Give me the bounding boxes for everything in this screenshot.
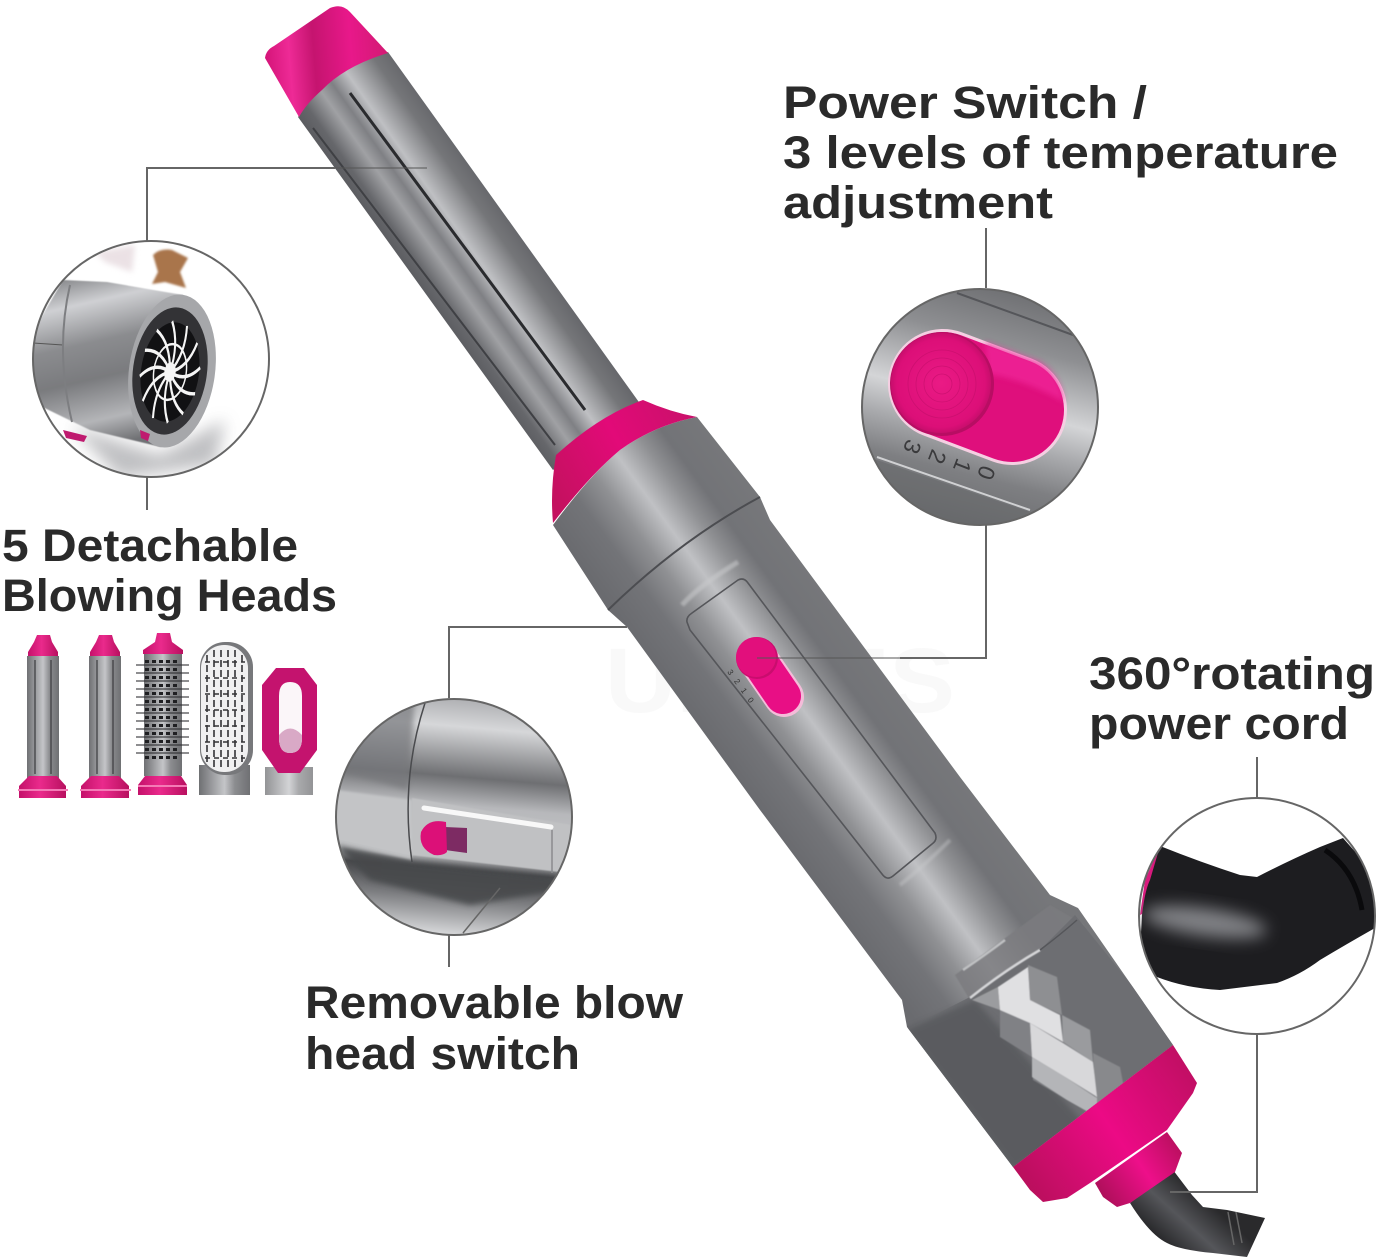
heading: rotating cord (1089, 648, 1375, 749)
heading: power switch: Power Switch / (783, 77, 1148, 128)
heading: removable head switch: head switch (305, 1028, 580, 1079)
callout circle: air outlet detail (28, 241, 269, 478)
neck collar (552, 400, 697, 523)
fan spokes (139, 320, 201, 424)
main product: hair styler (265, 6, 1265, 1257)
lower seams (963, 940, 1005, 970)
slot (424, 808, 551, 827)
attachment: curling barrel 1 (18, 635, 68, 798)
temperature numbers: 3 (898, 436, 927, 457)
heading: power switch (783, 77, 1338, 228)
temperature numbers (904, 440, 994, 479)
power cord (1130, 1170, 1265, 1257)
watermark: UMEES (605, 630, 955, 732)
connector line: power cord (1170, 757, 1257, 1192)
brown debris (152, 250, 188, 288)
handle upper seam (608, 497, 760, 610)
grip band between seams (956, 934, 1028, 997)
callout circle: removable head switch detail (336, 699, 572, 935)
panel bezel highlight (682, 562, 738, 605)
power slider (725, 637, 784, 707)
pink detail (63, 430, 87, 442)
heading: power switch: adjustment (783, 177, 1053, 228)
attachment set: five blowing heads (18, 633, 317, 798)
temperature numbers: 2 (923, 446, 952, 467)
power slider: 3 2 1 0 (725, 668, 757, 707)
curling barrel (298, 52, 641, 470)
heading: removable head switch (305, 977, 684, 1079)
attachment: round brush (136, 633, 189, 795)
connector line: power switch (757, 228, 986, 658)
lower grip section (905, 915, 1180, 1170)
heading: rotating cord: power cord (1089, 698, 1349, 749)
temperature numbers: 0 (972, 462, 1001, 483)
heading: removable head switch: Removable blow (305, 977, 684, 1028)
callout circle: power switch detail (862, 289, 1098, 530)
handle body (553, 417, 1180, 1170)
heading: power switch: 3 levels of temperature (783, 127, 1338, 178)
cord knob (1095, 1132, 1182, 1207)
switch window (445, 827, 467, 853)
heading: detachable heads (2, 520, 337, 621)
connector line: blowing heads (147, 168, 427, 241)
barrel tip cap (265, 6, 388, 117)
outlet cylinder (28, 280, 183, 447)
connector line: blow head switch (449, 627, 627, 967)
attachment: flat paddle brush (199, 642, 253, 795)
heading: detachable heads: Blowing Heads (2, 570, 337, 621)
temperature numbers: 1 (948, 455, 977, 476)
heading: detachable heads: 5 Detachable (2, 520, 298, 571)
switch panel outline (687, 579, 936, 878)
pink switch (421, 821, 447, 855)
connector line: heads caption (146, 477, 148, 510)
callout circle: rotating cord detail (1139, 798, 1378, 1034)
attachment: pink dryer nozzle (262, 668, 317, 795)
heading: rotating cord: 360°rotating (1089, 648, 1375, 699)
end collar (1013, 1045, 1197, 1202)
slider knob (890, 332, 994, 436)
attachment: curling barrel 2 (80, 635, 131, 798)
surface shadow (70, 420, 225, 478)
diamond grip pattern (972, 965, 1125, 1117)
slider track (943, 384, 1012, 410)
face ring (128, 294, 216, 448)
